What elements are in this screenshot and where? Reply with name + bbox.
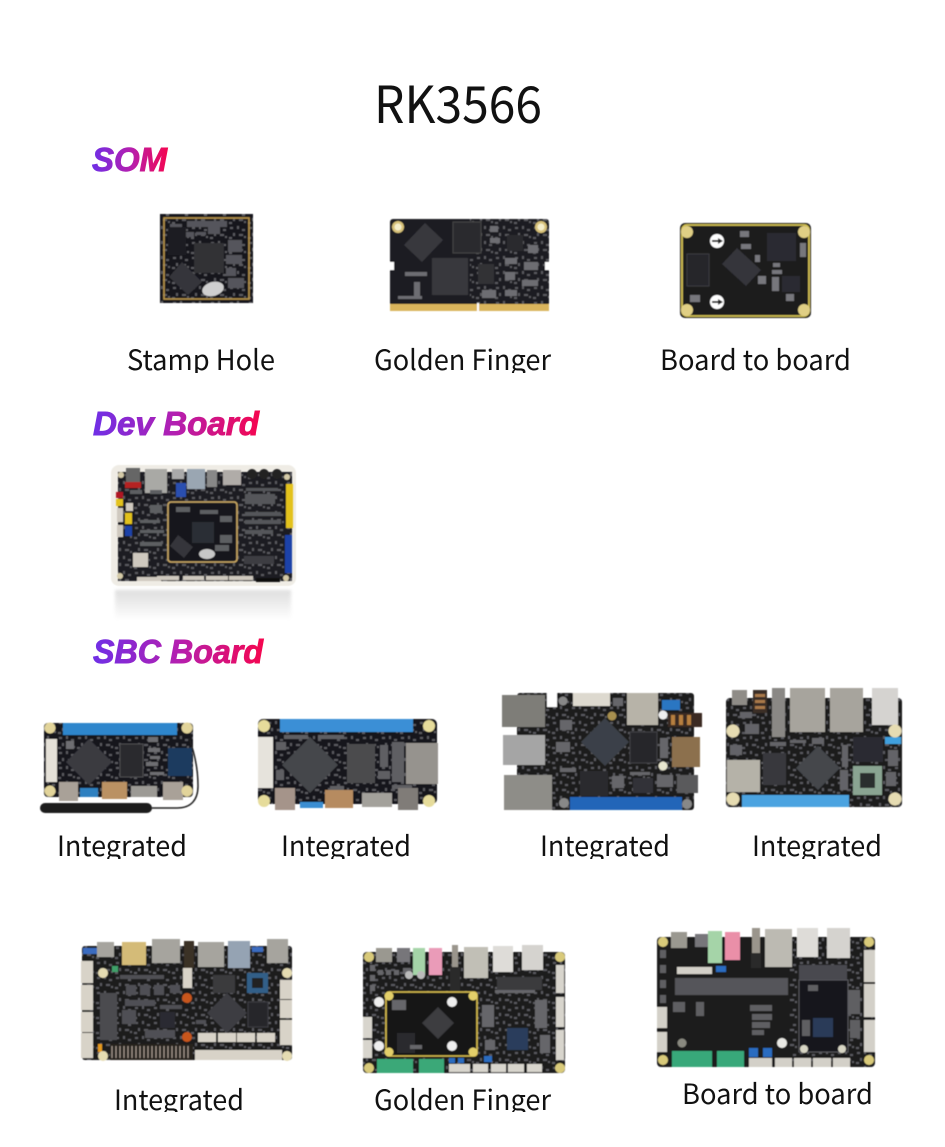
board: stamp hole SOM [160, 214, 253, 303]
label: Integrated 2: Integrated [281, 825, 411, 865]
board: SBC 3 [502, 693, 702, 810]
board reflection [115, 590, 291, 620]
board: SBC 7 board-to-board carrier [657, 928, 875, 1067]
board: SBC 5 [81, 939, 292, 1061]
board: SBC 4 [726, 688, 902, 807]
board: SBC 2 [258, 719, 438, 810]
board: SBC 6 golden-finger carrier [363, 945, 565, 1073]
board: development board [111, 465, 296, 620]
label: Integrated 3: Integrated [540, 825, 670, 865]
label: Stamp Hole: Stamp Hole [127, 339, 275, 379]
title: RK3566 [374, 64, 542, 138]
label: Golden Finger (SOM): Golden Finger [374, 339, 551, 379]
antenna [40, 738, 198, 813]
heading: SOM: SOM [92, 141, 169, 178]
label: Golden Finger (SBC): Golden Finger [374, 1079, 551, 1119]
board: board-to-board SOM [680, 223, 811, 318]
label: Integrated 1: Integrated [57, 825, 187, 865]
label: Integrated 4: Integrated [752, 825, 882, 865]
heading: Dev Board: Dev Board [93, 405, 260, 442]
label: Board to board (SOM): Board to board [660, 339, 851, 379]
label: Board to board (SBC): Board to board [682, 1073, 873, 1113]
label: Integrated 5: Integrated [114, 1079, 244, 1119]
heading: SBC Board: SBC Board [93, 633, 264, 670]
board: golden finger SOM [389, 219, 550, 311]
board: SBC 1 with antenna [40, 722, 198, 813]
